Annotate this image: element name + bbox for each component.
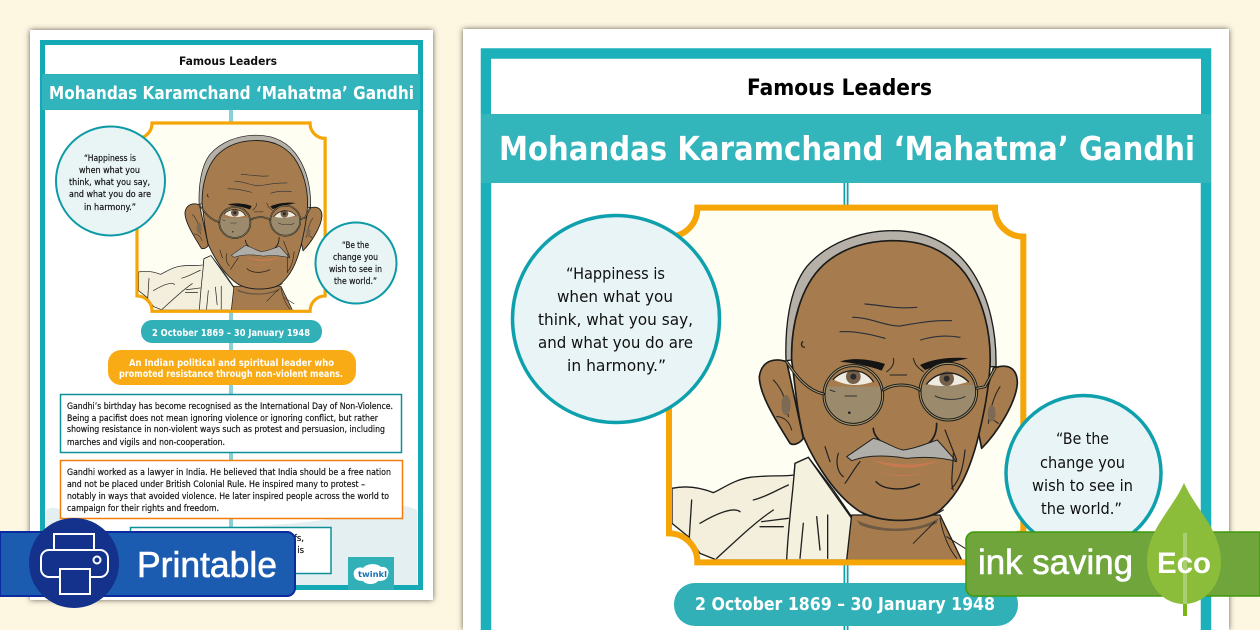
small quote: happiness: think, what you say, bbox=[69, 178, 150, 188]
small text box: lawyer bbox=[60, 460, 402, 518]
small poster page bbox=[30, 30, 433, 600]
small text box: Non-Violence: showing resistance in non-violent ways such as protest and persuasion, including bbox=[67, 425, 385, 435]
small quote: be the change: wish to see in bbox=[329, 265, 382, 275]
small quote: happiness bbox=[56, 126, 165, 236]
large quote: happiness: when what you bbox=[557, 287, 673, 306]
ink saving label: ink saving bbox=[978, 543, 1133, 582]
large date pill bbox=[674, 583, 1018, 626]
small date pill bbox=[141, 320, 322, 343]
large quote: happiness: “Happiness is bbox=[566, 264, 665, 283]
large header: Famous Leaders: Famous Leaders bbox=[747, 76, 932, 101]
large poster frame bbox=[486, 54, 1206, 630]
large title band bbox=[481, 114, 1211, 183]
small text box: Non-Violence: Being a pacifist does not mean ignoring violence or ignoring conflict, but rather bbox=[67, 414, 378, 424]
small timeline line bbox=[230, 110, 232, 527]
small summary pill: An Indian political and spiritual leader who bbox=[129, 358, 334, 369]
small title band: Mohandas Karamchand ‘Mahatma’ Gandhi bbox=[49, 83, 414, 104]
large quote: happiness: think, what you say, bbox=[538, 310, 693, 329]
small date pill: 2 October 1869 – 30 January 1948 bbox=[152, 328, 310, 339]
small text box: Non-Violence: Gandhi’s birthday has become recognised as the International Day of Non-Violence. bbox=[67, 402, 393, 412]
large header: Famous Leaders bbox=[491, 59, 1201, 114]
small poster frame bbox=[42, 42, 420, 588]
small quote: happiness: in harmony.” bbox=[84, 203, 136, 213]
small quote: be the change bbox=[316, 222, 396, 304]
panel: small poster preview bbox=[30, 30, 433, 600]
small quote: be the change: the world.” bbox=[334, 277, 377, 287]
small summary pill: promoted resistance through non-violent means. bbox=[119, 369, 343, 380]
large quote: be the change: wish to see in bbox=[1032, 476, 1133, 495]
large date pill: 2 October 1869 – 30 January 1948 bbox=[695, 594, 995, 615]
panel: large poster preview bbox=[463, 29, 1229, 630]
banner: ink saving Eco bbox=[966, 483, 1260, 616]
large quote: be the change: the world.” bbox=[1041, 499, 1122, 518]
small text box: lawyer: notably in ways that avoided violence. He later inspired people across the world to bbox=[67, 492, 389, 502]
large quote: be the change bbox=[1006, 396, 1161, 550]
icon: printer bbox=[29, 518, 119, 608]
large quote: be the change: change you bbox=[1040, 453, 1125, 472]
small header: Famous Leaders bbox=[45, 45, 418, 74]
small text box: Non-Violence: marches and vigils and non-cooperation. bbox=[67, 438, 225, 448]
small text box: Non-Violence bbox=[60, 394, 402, 452]
large quote: happiness: and what you do are bbox=[538, 333, 693, 352]
large quote: happiness bbox=[512, 216, 720, 422]
icon: eco drop bbox=[1147, 483, 1221, 616]
small summary pill bbox=[108, 350, 356, 385]
banner bar bbox=[966, 532, 1260, 596]
twinkl logo bbox=[348, 557, 394, 590]
banner bar bbox=[0, 532, 295, 596]
small text box: lawyer: and not be placed under British Colonial Rule. He inspired many to protest – bbox=[67, 480, 365, 490]
small portrait bbox=[137, 123, 325, 311]
small title band bbox=[42, 74, 420, 110]
large quote: be the change: “Be the bbox=[1056, 429, 1109, 448]
small text box: partly hidden: fs, bbox=[294, 534, 304, 544]
small header: Famous Leaders: Famous Leaders bbox=[179, 54, 277, 68]
large portrait bbox=[669, 208, 1023, 562]
small quote: happiness: “Happiness is bbox=[84, 154, 137, 164]
icon: eco drop: Eco bbox=[1157, 547, 1211, 580]
large poster page bbox=[463, 29, 1229, 630]
small quote: be the change: “Be the bbox=[342, 241, 369, 251]
banner: Printable bbox=[0, 518, 295, 608]
small text box: lawyer: Gandhi worked as a lawyer in India. He believed that India should be a free nation bbox=[67, 468, 391, 478]
small text box: partly hidden: is bbox=[297, 546, 305, 556]
small poster hills background bbox=[46, 506, 417, 585]
large timeline line bbox=[844, 183, 848, 630]
twinkl logo: twinkl bbox=[358, 570, 387, 579]
printable label: Printable bbox=[137, 544, 277, 585]
small quote: happiness: when what you bbox=[79, 166, 140, 176]
small text box: partly hidden bbox=[130, 528, 331, 574]
large quote: happiness: in harmony.” bbox=[567, 356, 666, 375]
small quote: be the change: change you bbox=[333, 253, 378, 263]
small quote: happiness: and what you do are bbox=[69, 190, 151, 200]
small text box: lawyer: campaign for their rights and freedom. bbox=[67, 504, 219, 514]
